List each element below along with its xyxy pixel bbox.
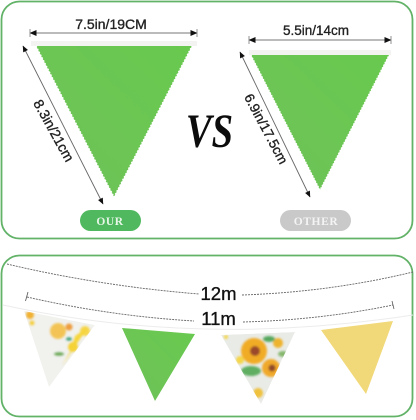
floral flag: yellow flowers [24, 311, 95, 387]
floral flag: sunflowers [221, 332, 295, 404]
badge: other: OTHER [294, 216, 338, 228]
badge: our [80, 210, 141, 231]
badge: other [280, 210, 351, 231]
VS label: VS [186, 105, 233, 158]
11m measurement: 11m [201, 308, 236, 329]
length dimension: other flag: 6.9in/17.5cm [241, 91, 291, 167]
11m measurement [26, 292, 394, 329]
width dimension: our flag: 7.5in/19CM [75, 16, 147, 32]
width dimension: other flag: 5.5in/14cm [283, 23, 349, 38]
length dimension: our flag [23, 46, 103, 204]
12m measurement: 12m [200, 283, 236, 304]
badge: our: OUR [96, 216, 124, 228]
panel: size comparison [2, 2, 412, 238]
other pennant flag [249, 50, 391, 190]
length dimension: other flag [240, 52, 310, 197]
panel: length comparison [2, 256, 413, 416]
our pennant flag [31, 41, 197, 197]
length dimension: our flag: 8.3in/21cm [30, 97, 77, 164]
12m measurement [7, 264, 413, 304]
plain green flag [122, 328, 195, 401]
ribbon [3, 305, 413, 329]
plain yellow flag [321, 321, 393, 394]
